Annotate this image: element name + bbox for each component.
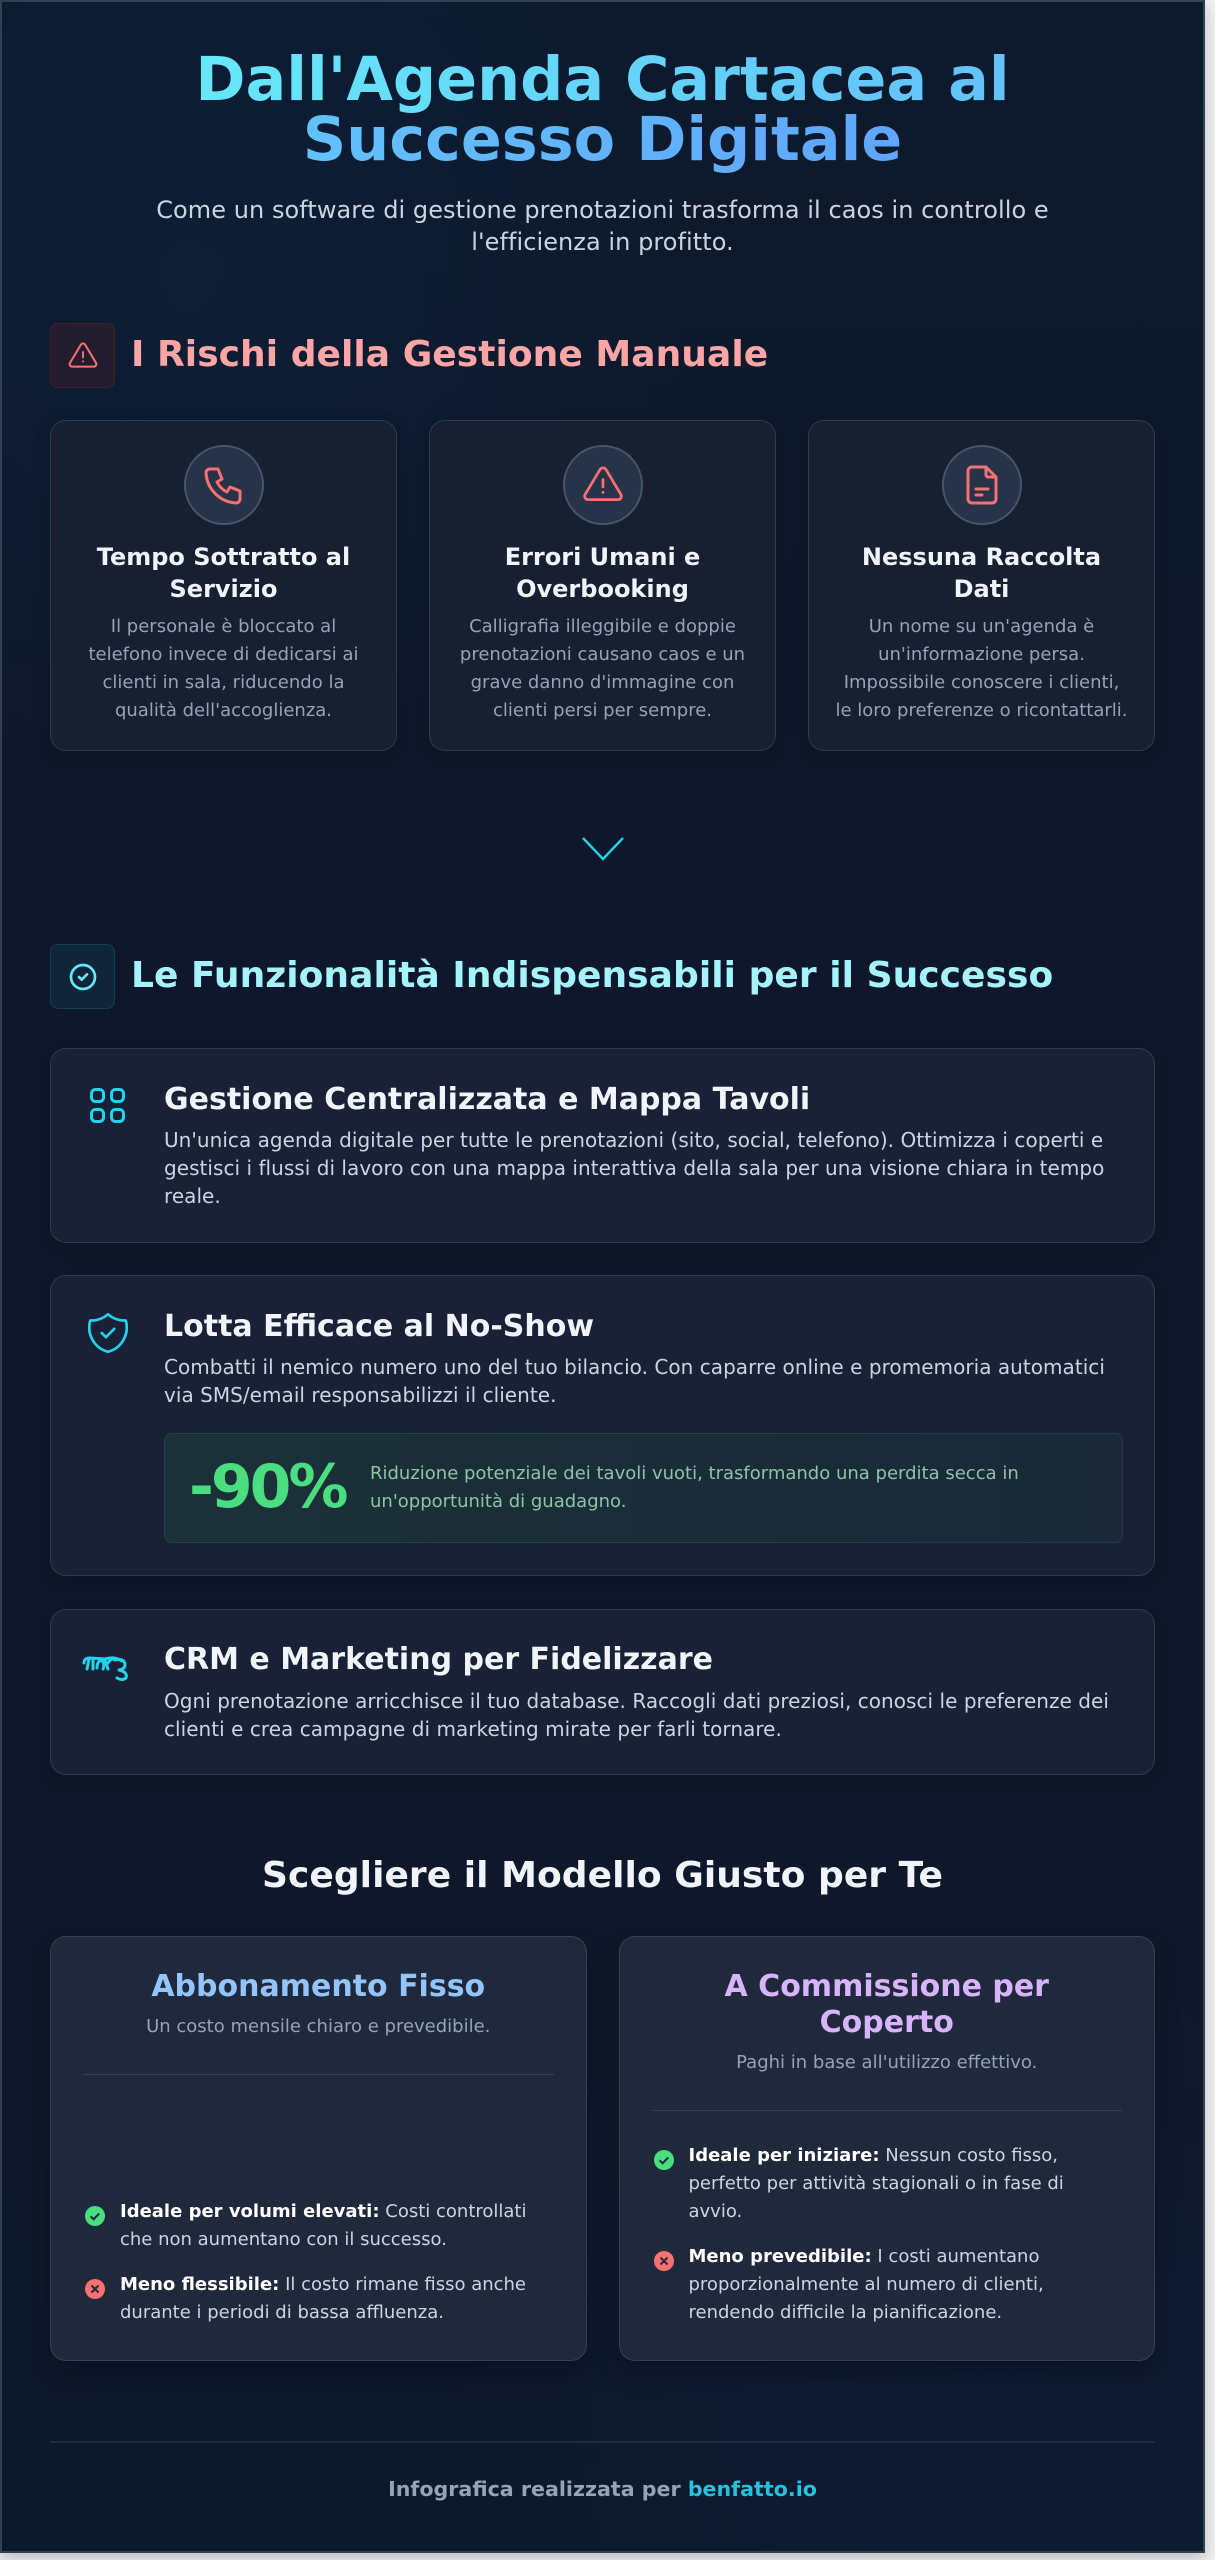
- subtitle: [156, 196, 1049, 256]
- feature text: Combatti il nemico numero uno del tuo bilancio. Con caparre online e promemoria automatici: [164, 1355, 1105, 1379]
- card description: qualità dell'accoglienza.: [115, 700, 332, 721]
- card title: Errori Umani e: [505, 543, 700, 571]
- pro text: Ideale per iniziare: Nessun costo fisso,: [688, 2145, 1058, 2166]
- card description: clienti in sala, riducendo la: [102, 672, 344, 693]
- card title: Overbooking: [516, 575, 689, 603]
- feature text: clienti e crea campagne di marketing mirate per farli tornare.: [164, 1717, 782, 1741]
- card description: Il personale è bloccato al: [111, 616, 336, 637]
- pro item: [85, 2201, 526, 2250]
- card title: Servizio: [170, 575, 277, 603]
- model title: Abbonamento Fisso: [151, 1969, 485, 2004]
- panel: risk 1: [50, 420, 397, 751]
- pro text: [120, 2201, 526, 2250]
- icon: risks section warning: [50, 323, 115, 388]
- stat caption: Riduzione potenziale dei tavoli vuoti, trasformando una perdita secca in: [370, 1463, 1019, 1484]
- icon: check: [654, 2150, 674, 2170]
- icon: check: [85, 2206, 105, 2226]
- panel: feature CRM: [50, 1609, 1155, 1775]
- icon: grid: [90, 1088, 125, 1123]
- subtitle: l'efficienza in profitto.: [471, 228, 734, 256]
- pro text: [688, 2145, 1064, 2222]
- callout: -90% stat: [164, 1433, 1123, 1543]
- pro text: avvio.: [688, 2201, 742, 2222]
- card description: grave danno d'immagine con: [471, 672, 734, 693]
- con item: [85, 2274, 526, 2323]
- heading: models: Scegliere il Modello Giusto per Te: [262, 1855, 943, 1896]
- con text: Meno flessibile: Il costo rimane fisso anche: [120, 2274, 526, 2295]
- con text: [120, 2274, 526, 2323]
- con text: durante i periodi di bassa affluenza.: [120, 2302, 444, 2323]
- title: [195, 45, 1010, 175]
- panel: per-cover commission: [618, 1936, 1155, 2361]
- card title: [505, 543, 700, 603]
- icon: features section check: [50, 944, 115, 1009]
- panel: feature centralized management: [50, 1048, 1155, 1243]
- card description: un'informazione persa.: [878, 644, 1085, 665]
- stat number: -90%: [189, 1452, 346, 1522]
- model title: Coperto: [820, 2005, 954, 2040]
- con text: proporzionalmente al numero di clienti,: [688, 2274, 1044, 2295]
- heading: risks: I Rischi della Gestione Manuale: [131, 334, 768, 375]
- card description: le loro preferenze o ricontattarli.: [835, 700, 1128, 721]
- card description: Un nome su un'agenda è: [869, 616, 1094, 637]
- feature title: Lotta Efficace al No-Show: [164, 1309, 594, 1344]
- card title: [862, 543, 1101, 603]
- card description: telefono invece di dedicarsi ai: [88, 644, 359, 665]
- heading: features: Le Funzionalità Indispensabili per il Successo: [131, 955, 1053, 996]
- con text: [688, 2246, 1044, 2323]
- card title: Tempo Sottratto al: [97, 543, 350, 571]
- icon: shield check: [88, 1313, 128, 1353]
- icon: warning triangle: [562, 445, 642, 525]
- card description: [88, 616, 359, 721]
- footer: Infografica realizzata per benfatto.io: [388, 2477, 817, 2501]
- card title: [96, 543, 350, 603]
- card title: Dati: [954, 575, 1009, 603]
- arrow: chevron down: [582, 837, 624, 861]
- feature text: Un'unica agenda digitale per tutte le prenotazioni (sito, social, telefono). Ottimizza i coperti e: [164, 1128, 1103, 1152]
- title: Successo Digitale: [303, 105, 902, 175]
- icon: phone: [184, 445, 264, 525]
- title: Dall'Agenda Cartacea al: [195, 45, 1010, 115]
- pro text: Ideale per volumi elevati: Costi controllati: [120, 2201, 526, 2222]
- model subtitle: Un costo mensile chiaro e prevedibile.: [146, 2016, 490, 2037]
- stat caption: un'opportunità di guadagno.: [370, 1491, 626, 1512]
- icon: cross: [85, 2279, 105, 2299]
- pro text: perfetto per attività stagionali o in fase di: [688, 2173, 1064, 2194]
- con text: Meno prevedibile: I costi aumentano: [688, 2246, 1039, 2267]
- card description: Calligrafia illeggibile e doppie: [469, 616, 736, 637]
- card description: Impossibile conoscere i clienti,: [844, 672, 1119, 693]
- card description: [835, 616, 1128, 721]
- feature text: reale.: [164, 1184, 221, 1208]
- con item: [654, 2246, 1044, 2323]
- panel: fixed subscription: [50, 1936, 586, 2361]
- feature title: CRM e Marketing per Fidelizzare: [164, 1642, 713, 1677]
- feature text: [164, 1689, 1109, 1741]
- icon: cross: [654, 2251, 674, 2271]
- model subtitle: Paghi in base all'utilizzo effettivo.: [736, 2052, 1037, 2073]
- feature text: [164, 1128, 1104, 1208]
- feature title: Gestione Centralizzata e Mappa Tavoli: [164, 1082, 810, 1117]
- icon: CRM glyph: [82, 1656, 128, 1681]
- feature text: via SMS/email responsabilizzi il cliente.: [164, 1383, 556, 1407]
- feature text: [164, 1355, 1105, 1407]
- stat caption: [370, 1463, 1019, 1512]
- panel: risk 2: [429, 420, 776, 751]
- pro item: [654, 2145, 1064, 2222]
- panel: feature no-show: [50, 1275, 1155, 1576]
- subtitle: Come un software di gestione prenotazioni trasforma il caos in controllo e: [156, 196, 1049, 224]
- con text: rendendo difficile la pianificazione.: [688, 2302, 1002, 2323]
- card title: Nessuna Raccolta: [862, 543, 1101, 571]
- pro text: che non aumentano con il successo.: [120, 2229, 447, 2250]
- feature text: gestisci i flussi di lavoro con una mappa interattiva della sala per una visione chiara in tempo: [164, 1156, 1104, 1180]
- model title: [724, 1969, 1049, 2040]
- card description: clienti persi per sempre.: [493, 700, 712, 721]
- icon: file: [942, 445, 1022, 525]
- card description: prenotazioni causano caos e un: [460, 644, 745, 665]
- feature text: Ogni prenotazione arricchisce il tuo database. Raccogli dati preziosi, conosci le preferenze dei: [164, 1689, 1109, 1713]
- card description: [460, 616, 745, 721]
- panel: risk 3: [808, 420, 1155, 751]
- model title: A Commissione per: [725, 1969, 1049, 2004]
